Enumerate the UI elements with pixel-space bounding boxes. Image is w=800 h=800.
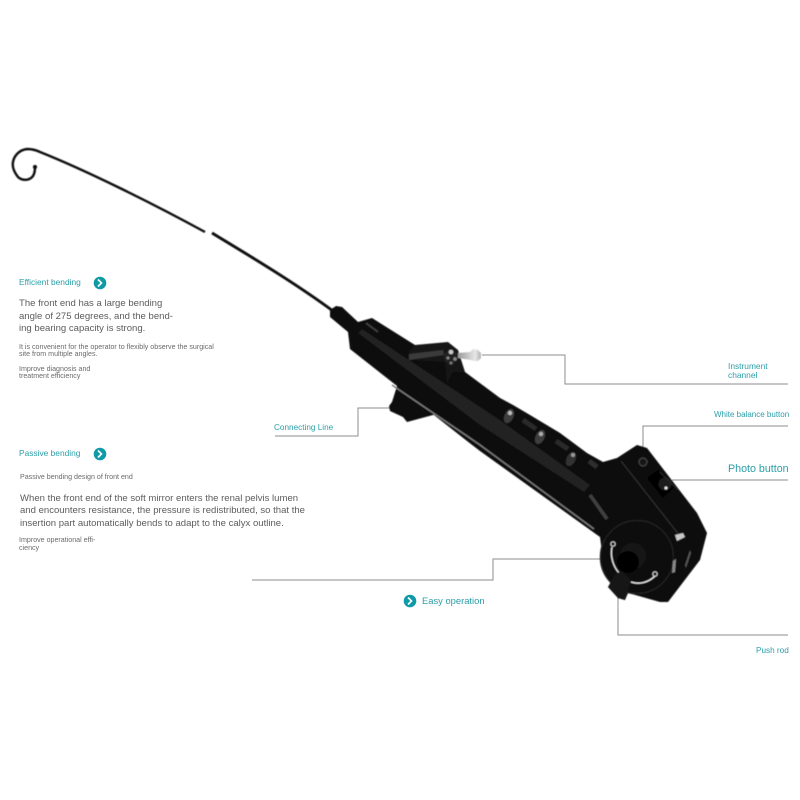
body text: resistance: insertion part automatically bends to adapt to the calyx outline. — [20, 518, 284, 529]
small text: operational efficiency: Improve operational effi- — [19, 536, 96, 544]
label: photo button: Photo button — [728, 463, 789, 475]
handle edge highlight — [392, 385, 594, 529]
dial knob — [620, 543, 646, 569]
label: white balance button: White balance button — [714, 410, 789, 419]
rotary control dial — [600, 520, 691, 600]
flexible insertion cable with hook — [13, 149, 333, 311]
label: push rod: Push rod — [756, 646, 789, 655]
label: easy operation — [404, 595, 485, 607]
leader line: push rod — [618, 596, 788, 635]
icon: teal chevron circle — [404, 595, 416, 607]
handle grey stripe — [358, 329, 590, 492]
neck mark — [366, 323, 378, 332]
handle head panel — [587, 458, 680, 537]
body text: bending angle: The front end has a large bending — [19, 298, 162, 309]
white balance button — [639, 458, 647, 466]
small text: surgical site: site from multiple angles. — [19, 350, 97, 358]
leader line: photo button — [672, 479, 788, 481]
panel: passive bending — [19, 448, 305, 552]
icon: teal chevron circle — [94, 448, 106, 460]
small text: operational efficiency: ciency — [19, 544, 40, 552]
body text: resistance: When the front end of the soft mirror enters the renal pelvis lumen — [20, 493, 298, 504]
dial lever — [608, 571, 631, 600]
rear connector block — [389, 380, 440, 422]
instrument channel bracket — [409, 342, 465, 383]
head highlight — [590, 495, 607, 519]
label: connecting line: Connecting Line — [274, 423, 334, 432]
icon: teal chevron circle — [94, 277, 106, 289]
leader line: easy operation — [252, 559, 604, 580]
side grip buttons — [502, 407, 597, 468]
heading: efficient bending: Efficient bending — [19, 277, 81, 287]
panel: efficient bending — [19, 277, 214, 380]
small text: passive design: Passive bending design of front end — [20, 473, 133, 481]
handle body — [330, 306, 707, 602]
body text: bending angle: ing bearing capacity is strong. — [19, 323, 145, 334]
small text: surgical site: It is convenient for the operator to flexibly observe the surgical — [19, 343, 214, 351]
leader line: connecting line — [275, 408, 392, 436]
instrument channel port cap — [458, 349, 481, 361]
leader line: instrument channel — [482, 355, 788, 384]
leader line: white balance button — [643, 426, 788, 448]
body text: resistance: and encounters resistance, the pressure is redistributed, so that the — [20, 505, 305, 516]
small text: efficiency: treatment efficiency — [19, 372, 81, 380]
heading: passive bending: Passive bending — [19, 448, 81, 458]
small text: efficiency: Improve diagnosis and — [19, 365, 90, 373]
label: instrument channel: channel — [728, 370, 757, 380]
label: instrument channel: Instrument — [728, 361, 768, 371]
body text: bending angle: angle of 275 degrees, and the bend- — [19, 311, 173, 322]
photo button — [647, 470, 675, 498]
endoscope device — [13, 149, 707, 602]
heading: easy operation: Easy operation — [422, 595, 485, 606]
